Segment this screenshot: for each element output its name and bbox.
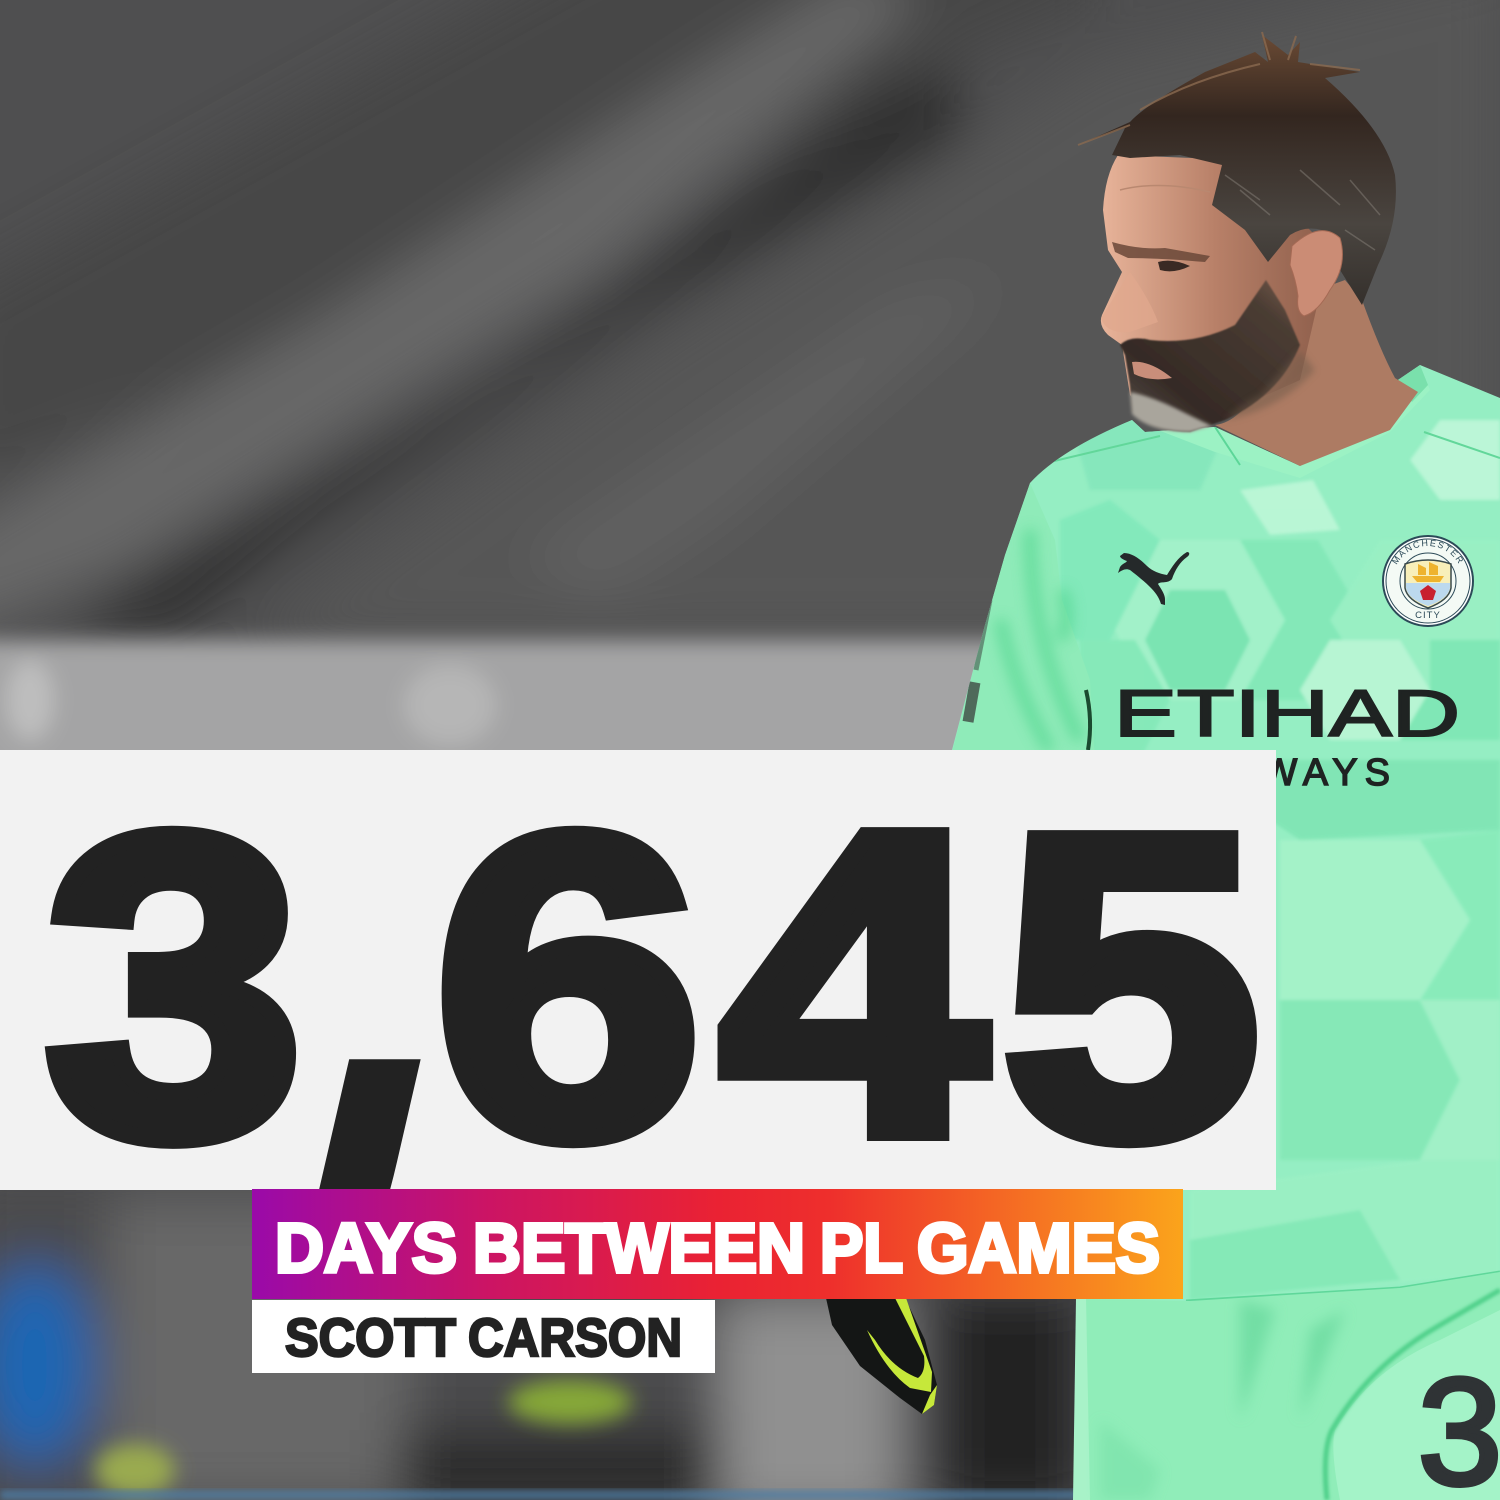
player: face xyxy=(1101,155,1330,425)
player name: CARSON xyxy=(468,1308,682,1368)
club crest xyxy=(1382,535,1474,627)
label: days between PL games: DAYS xyxy=(275,1209,457,1287)
jersey hem xyxy=(1186,1272,1500,1301)
label: days between PL games xyxy=(275,1209,1160,1287)
sponsor wordmark: ETIHAD xyxy=(1114,676,1460,750)
player: neck xyxy=(1215,280,1418,466)
jersey hexagon pattern xyxy=(1060,420,1500,1300)
headline number 3,645: 6 xyxy=(434,746,702,1226)
headline number 3,645: 5 xyxy=(1002,746,1260,1226)
player: shorts xyxy=(1073,1265,1500,1500)
headline number 3,645: , xyxy=(241,395,608,1376)
name plate xyxy=(252,1300,715,1373)
player: jersey xyxy=(952,365,1500,1301)
stat panel xyxy=(0,750,1276,1190)
player: facial features xyxy=(1101,185,1315,432)
gradient label bar xyxy=(252,1189,1183,1299)
puma logo xyxy=(1118,552,1189,605)
label: days between PL games: PL xyxy=(820,1209,903,1287)
player name xyxy=(285,1308,682,1368)
sponsor wordmark xyxy=(1120,690,1457,786)
club crest: MANCHESTER xyxy=(1392,540,1463,564)
jersey sleeve xyxy=(950,483,1095,760)
player: ear xyxy=(1290,231,1342,316)
player: hair xyxy=(1078,32,1396,305)
sponsor wordmark: AIRWAYS xyxy=(1178,752,1397,794)
collar xyxy=(1053,365,1500,466)
label: days between PL games: BETWEEN xyxy=(473,1209,805,1287)
headline number 3,645 xyxy=(44,826,1257,1189)
headline number 3,645: 4 xyxy=(720,744,989,1224)
club crest: CITY xyxy=(1415,610,1441,621)
player: glove xyxy=(826,1298,937,1414)
label: days between PL games: GAMES xyxy=(917,1209,1160,1287)
headline number 3,645: 3 xyxy=(45,746,303,1226)
player name: SCOTT xyxy=(285,1308,456,1368)
